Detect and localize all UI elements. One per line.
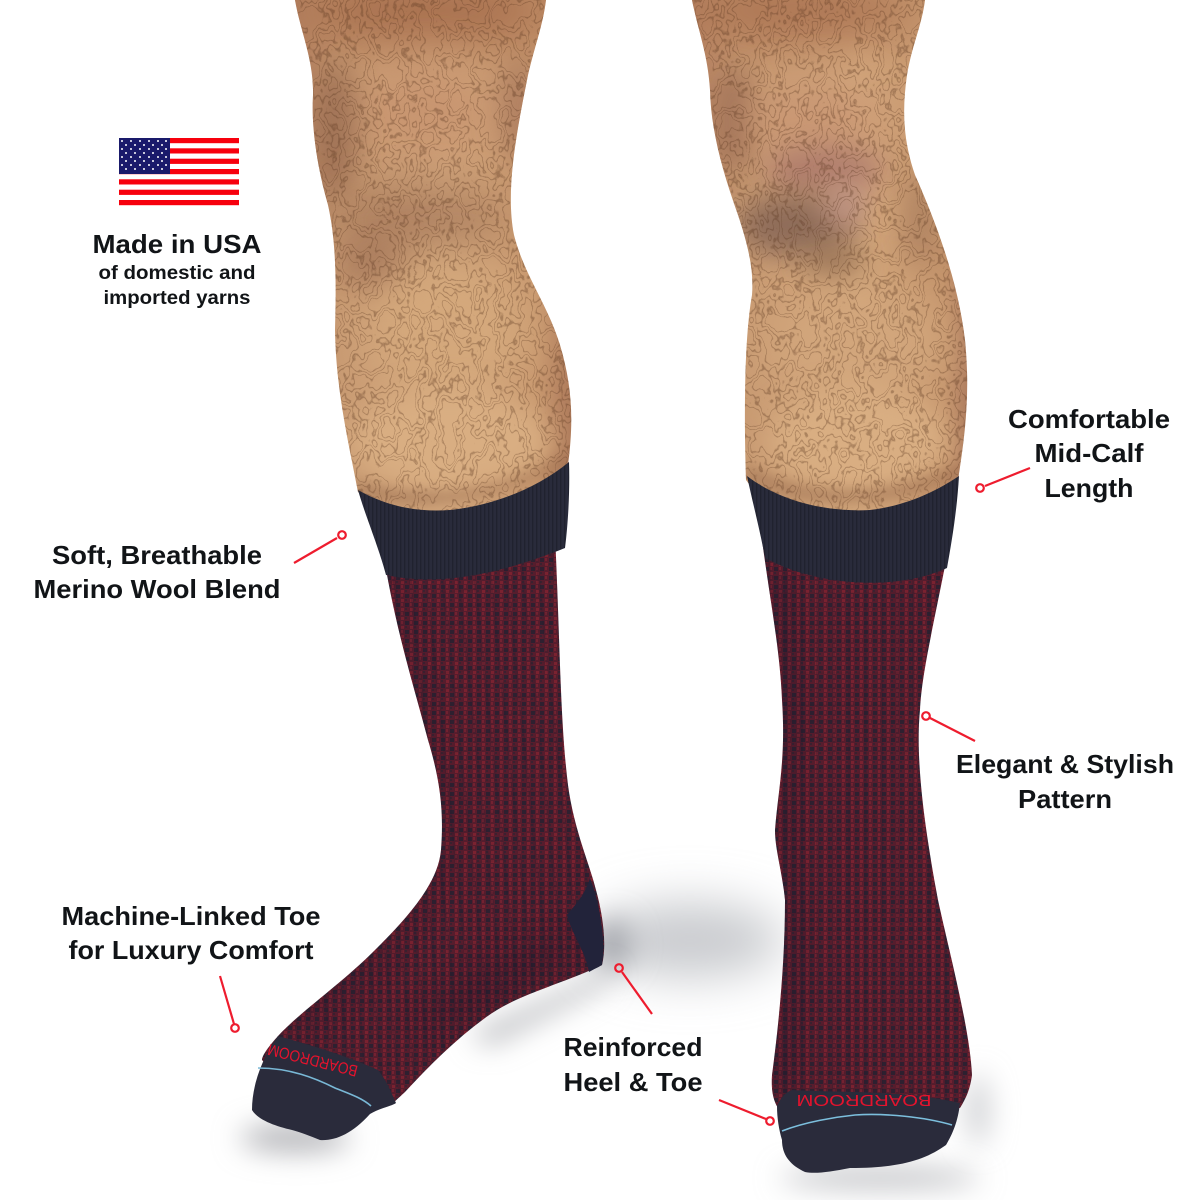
left toe <box>252 1036 396 1140</box>
callout: length <box>976 468 1030 492</box>
text: pattern: Pattern <box>1018 784 1112 814</box>
text: mid-calf length: Length <box>1044 473 1134 503</box>
right toe <box>777 1090 960 1173</box>
text: merino wool: Soft, Breathable <box>52 540 262 570</box>
heel patch <box>567 878 603 972</box>
text: pattern <box>956 749 1174 814</box>
callout: machine-linked toe <box>220 976 239 1032</box>
text: reinforced: Heel & Toe <box>564 1067 702 1097</box>
text: made in USA <box>92 229 262 309</box>
sock body pattern <box>762 545 972 1108</box>
callout: heel <box>615 964 652 1014</box>
callout: toe <box>719 1100 774 1125</box>
text: pattern: Elegant & Stylish <box>956 749 1174 779</box>
text: merino wool: Merino Wool Blend <box>34 574 280 604</box>
text: reinforced: Reinforced <box>564 1032 702 1062</box>
text: machine-linked toe: for Luxury Comfort <box>68 935 314 965</box>
right leg <box>692 0 968 510</box>
text: merino wool <box>34 540 280 604</box>
text: machine-linked toe <box>62 901 320 965</box>
left sock <box>252 462 604 1140</box>
text: made in USA: Made in USA <box>92 229 262 259</box>
callout: wool <box>294 531 346 563</box>
text: machine-linked toe: Machine-Linked Toe <box>62 901 320 931</box>
left brand: BOARDROOM <box>266 1040 360 1079</box>
text: mid-calf length: Mid-Calf <box>1034 438 1144 468</box>
left leg <box>295 0 572 510</box>
floor shadows <box>240 902 988 1188</box>
text: made in USA: of domestic and <box>98 263 256 284</box>
right cuff <box>747 476 959 583</box>
text: mid-calf length: Comfortable <box>1008 404 1170 434</box>
right toe seam <box>782 1114 952 1131</box>
flag: USA <box>119 138 239 205</box>
left toe seam <box>258 1068 371 1106</box>
right brand: BOARDROOM <box>796 1091 932 1108</box>
sock body pattern <box>262 552 604 1102</box>
text: made in USA: imported yarns <box>104 288 250 309</box>
callout: pattern <box>922 712 975 741</box>
text: reinforced <box>564 1032 702 1097</box>
right sock <box>747 476 990 1173</box>
left cuff <box>358 462 569 579</box>
text: mid-calf length <box>1008 404 1170 503</box>
